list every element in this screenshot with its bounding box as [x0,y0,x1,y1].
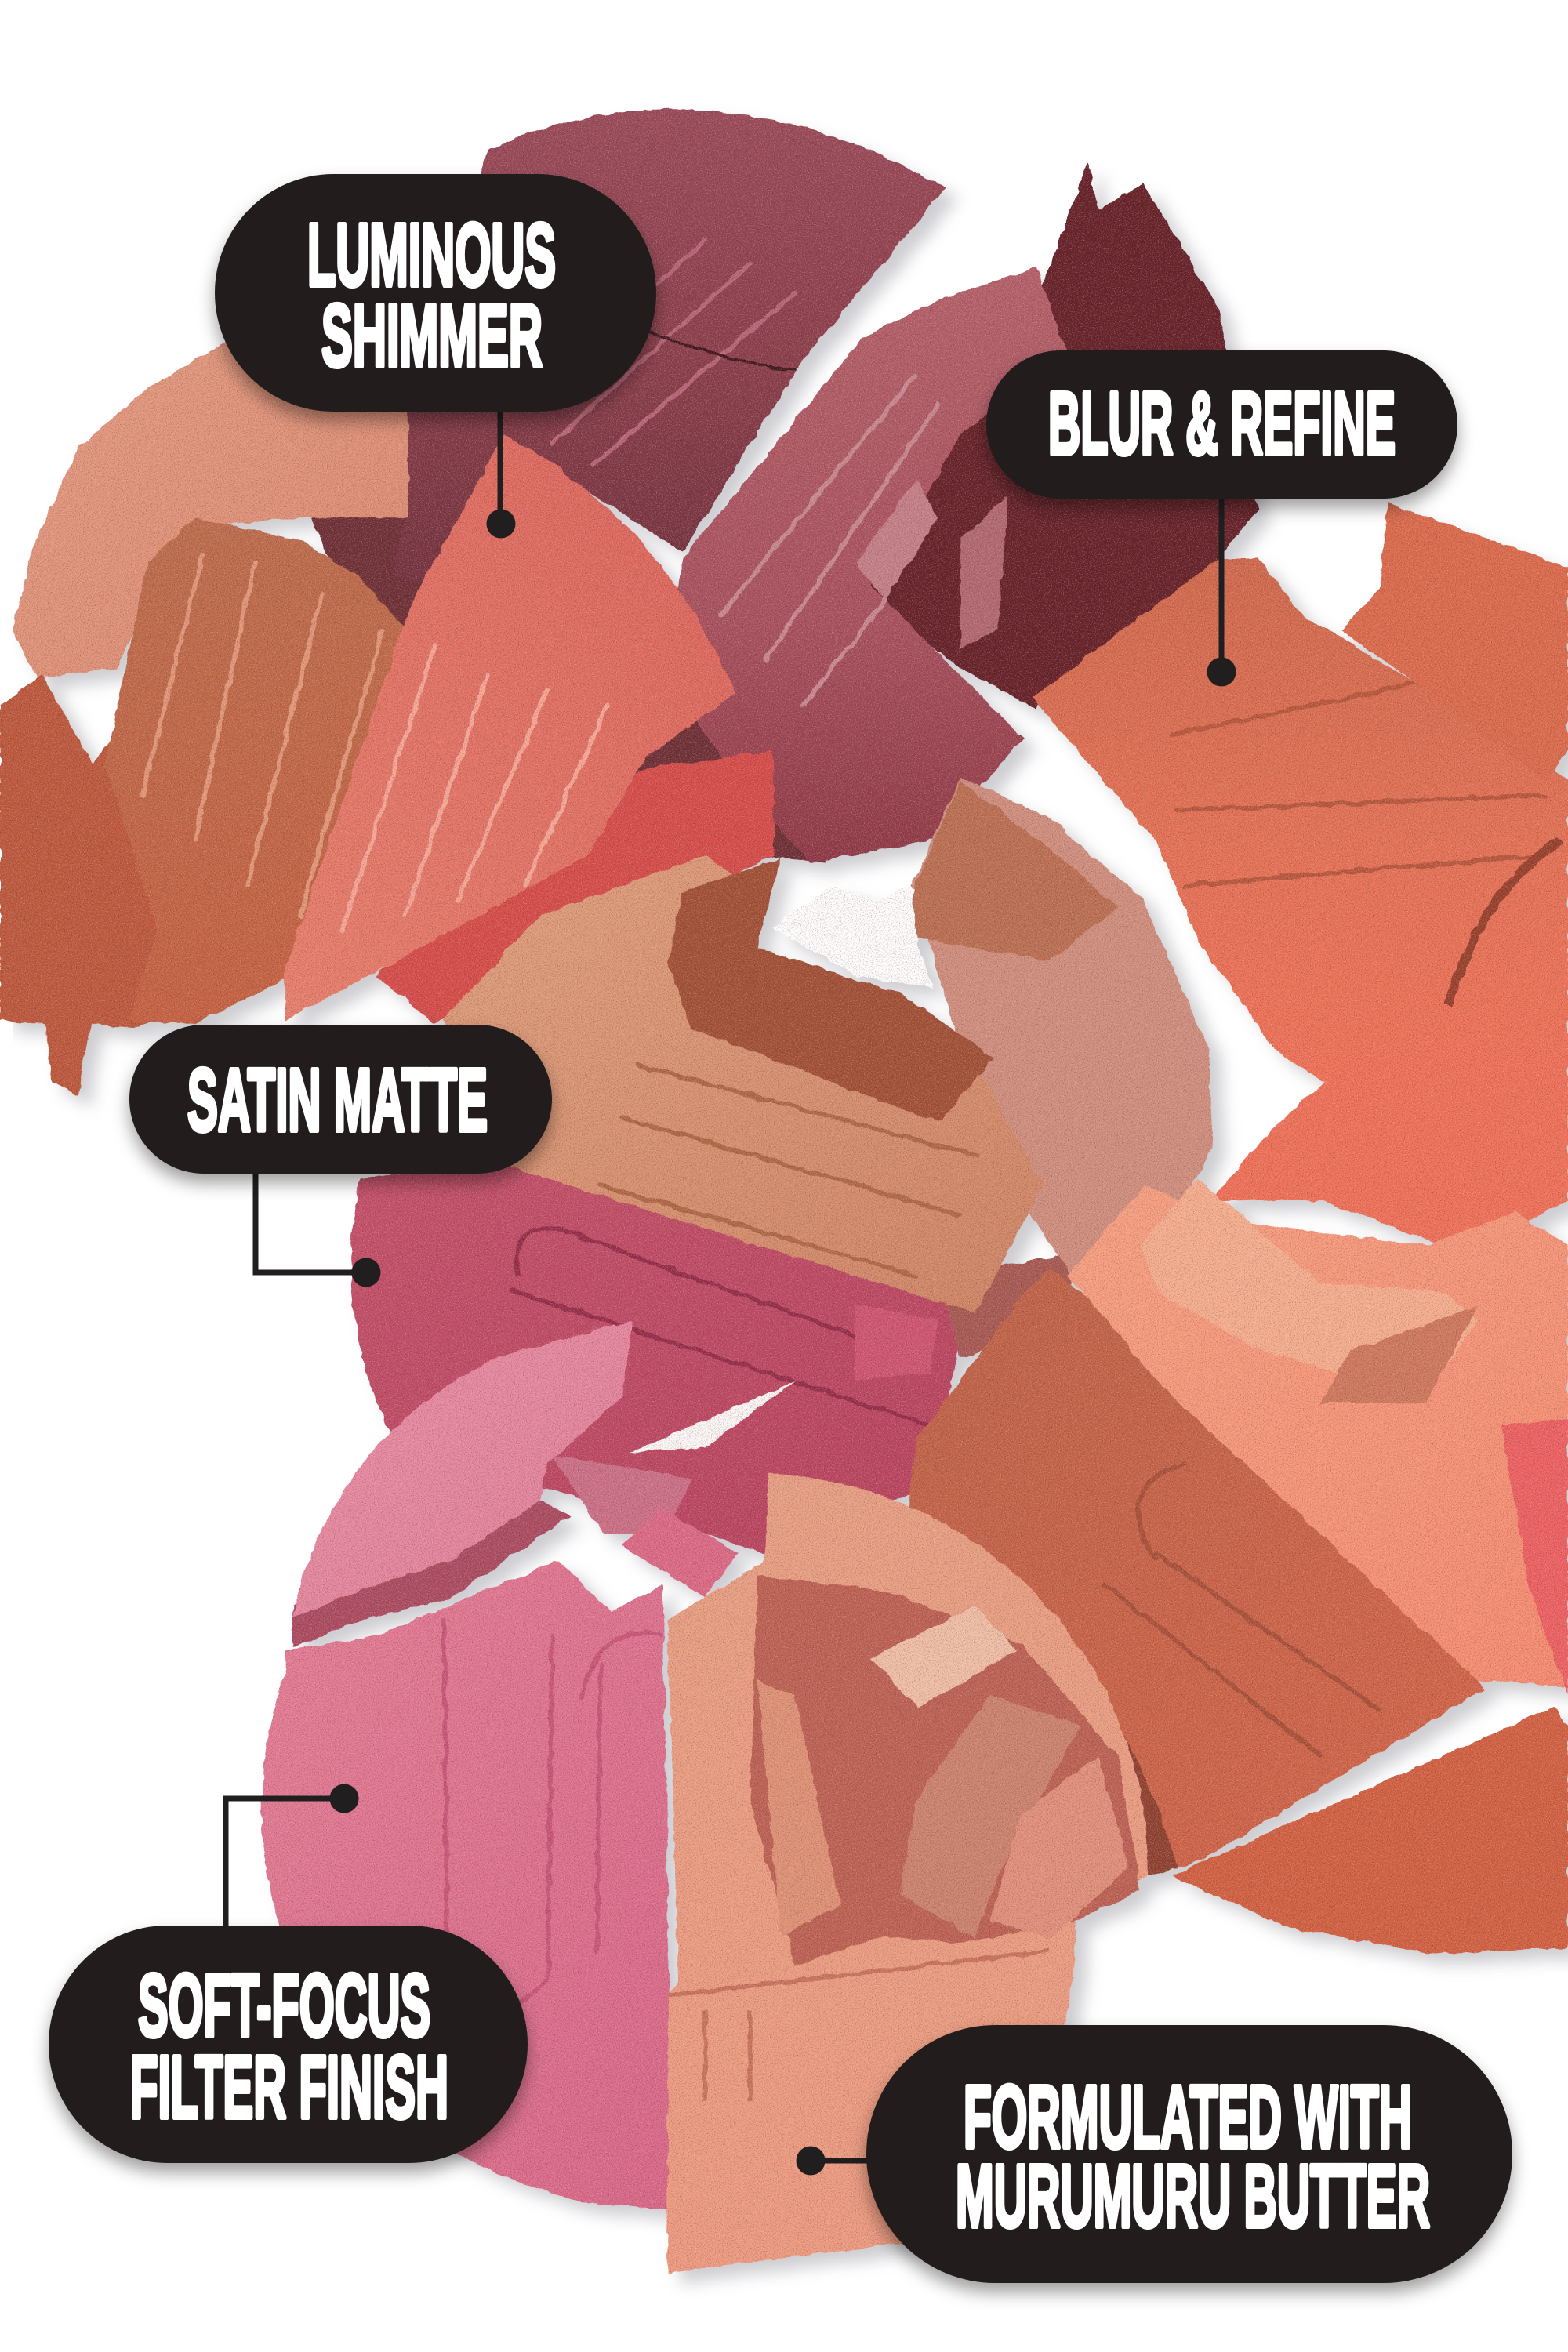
callout: satin matte [129,1025,552,1287]
blush piece: tan shimmer disc right [913,777,1212,1287]
callout: soft-focus filter finish [49,1784,528,2163]
white gap in pans [773,885,933,987]
callout: soft-focus filter finish: SOFT-FOCUS [138,1956,430,2055]
blush piece: red shard [375,750,775,1023]
blush piece: rose magenta disc [351,1163,967,1553]
blush piece: mauve cracked disc [648,267,1069,862]
blush piece: tan shimmer disc left [443,855,1043,1313]
blush piece: coral shimmer fan [285,435,735,1020]
blush piece: peach large section [1069,1178,1568,1696]
blush piece: pink lower disc [262,1560,672,2209]
blush piece: pink upper shard [292,1320,693,1647]
callout: soft-focus filter finish: FILTER FINISH [130,2038,448,2136]
blush piece: terracotta section [908,1268,1486,1875]
underlay: dark shadow behind central pans [307,480,840,931]
callout: formulated with murumuru butter [797,2025,1512,2283]
callout: satin matte: SATIN MATTE [187,1051,488,1149]
callout: luminous shimmer: LUMINOUS [307,205,556,304]
blush piece: orange top-right shard [1343,503,1568,780]
blush piece: dark maroon crumbles [848,162,1258,708]
callout: luminous shimmer: SHIMMER [321,286,543,385]
blush piece: orange upper piece [1118,1043,1568,1305]
blush piece: salmon disc [12,342,408,678]
callout: blur and refine [986,350,1457,687]
crumble: between rose and terracotta [938,1253,1080,1358]
callout: luminous shimmer [215,174,656,538]
blush piece: peach shimmer disc [668,1473,1148,2274]
blush piece: terracotta lower shard [1171,1708,1568,1954]
blush piece: rust crumbled edge [0,675,225,1095]
blush piece: brown embossed section [105,517,412,1023]
crumble: brown top of tan disc [668,858,993,1123]
blush piece: pink small lump [622,1508,739,1598]
blush piece: plum top disc [393,109,946,585]
blush piece: orange disc [1033,558,1568,1095]
